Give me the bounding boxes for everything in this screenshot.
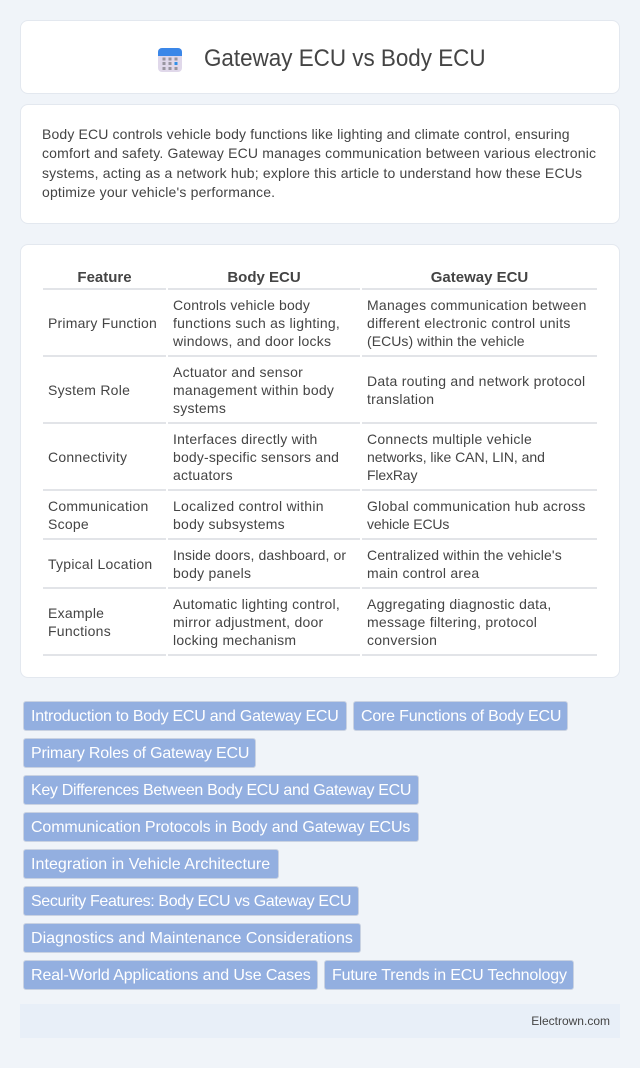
text: different electronic control units xyxy=(367,315,571,331)
text: Aggregating diagnostic data, xyxy=(367,596,551,612)
header card xyxy=(20,20,620,94)
text: management within body xyxy=(173,382,334,398)
tag: real-world xyxy=(23,960,318,990)
tag: integration: Integration in Vehicle Architecture xyxy=(31,856,270,873)
text: body-specific sensors and xyxy=(173,449,339,465)
text: Manages communication between xyxy=(367,297,587,313)
row: communication scope: Communication xyxy=(48,498,149,514)
tag: introduction: Introduction to Body ECU and Gateway ECU xyxy=(31,708,338,725)
tag: core functions xyxy=(353,701,568,731)
intro text xyxy=(42,126,596,200)
text: networks, like CAN, LIN, and xyxy=(367,449,545,465)
text: vehicle ECUs xyxy=(367,516,449,532)
text: actuators xyxy=(173,467,233,483)
tag: core functions: Core Functions of Body ECU xyxy=(361,708,561,725)
text: conversion xyxy=(367,632,437,648)
tag: introduction xyxy=(23,701,347,731)
row: communication scope xyxy=(48,498,149,532)
tag: communication protocols: Communication Protocols in Body and Gateway ECUs xyxy=(31,819,410,836)
header: Body ECU: Body ECU xyxy=(227,269,301,286)
intro text: optimize your vehicle's performance. xyxy=(42,184,275,200)
row: example functions xyxy=(48,605,111,639)
comparison table panel xyxy=(20,244,620,678)
text: Automatic lighting control, xyxy=(173,596,340,612)
tag: primary roles xyxy=(23,738,256,768)
icon: calendar xyxy=(158,48,182,72)
text: functions such as lighting, xyxy=(173,315,340,331)
text: Localized control within xyxy=(173,498,324,514)
tag: security xyxy=(23,886,359,916)
text: locking mechanism xyxy=(173,632,296,648)
intro text: systems, acting as a network hub; explore this article to understand how these ECUs xyxy=(42,165,582,181)
row: example functions: Example xyxy=(48,605,104,621)
text: Actuator and sensor xyxy=(173,364,303,380)
tag: diagnostics xyxy=(23,923,361,953)
text: Data routing and network protocol xyxy=(367,373,585,389)
text: body panels xyxy=(173,565,251,581)
header: Feature: Feature xyxy=(77,269,132,286)
header: Gateway ECU: Gateway ECU xyxy=(431,269,528,286)
text: Controls vehicle body xyxy=(173,297,310,313)
text: main control area xyxy=(367,565,479,581)
text: (ECUs) within the vehicle xyxy=(367,333,525,349)
intro card xyxy=(20,104,620,224)
text: Inside doors, dashboard, or xyxy=(173,547,346,563)
text: Interfaces directly with xyxy=(173,431,318,447)
intro text: comfort and safety. Gateway ECU manages communication between various electronic xyxy=(42,145,596,161)
row: primary function: Primary Function xyxy=(48,315,157,331)
tag: key differences: Key Differences Between Body ECU and Gateway ECU xyxy=(31,782,411,799)
tag: key differences xyxy=(23,775,419,805)
text: Centralized within the vehicle's xyxy=(367,547,562,563)
text: windows, and door locks xyxy=(173,333,331,349)
row: system role: System Role xyxy=(48,382,130,398)
tag: primary roles: Primary Roles of Gateway ECU xyxy=(31,745,249,762)
text: systems xyxy=(173,400,226,416)
text: mirror adjustment, door xyxy=(173,614,323,630)
footer credit: Electrown.com xyxy=(531,1014,610,1028)
tag: communication protocols xyxy=(23,812,419,842)
tag: security: Security Features: Body ECU vs Gateway ECU xyxy=(31,893,351,910)
tag: integration xyxy=(23,849,279,879)
tag: future trends: Future Trends in ECU Technology xyxy=(332,967,567,984)
tag: diagnostics: Diagnostics and Maintenance Considerations xyxy=(31,930,353,947)
tag: real-world: Real-World Applications and Use Cases xyxy=(31,967,311,984)
row: typical location: Typical Location xyxy=(48,556,152,572)
text: body subsystems xyxy=(173,516,285,532)
intro text: Body ECU controls vehicle body functions like lighting and climate control, ensuring xyxy=(42,126,570,142)
text: Global communication hub across xyxy=(367,498,586,514)
text: Connects multiple vehicle xyxy=(367,431,532,447)
text: translation xyxy=(367,391,434,407)
row: example functions: Functions xyxy=(48,623,111,639)
text: message filtering, protocol xyxy=(367,614,537,630)
row: communication scope: Scope xyxy=(48,516,89,532)
tag: future trends xyxy=(324,960,574,990)
text: FlexRay xyxy=(367,467,417,483)
row: connectivity: Connectivity xyxy=(48,449,127,465)
title: Gateway ECU vs Body ECU xyxy=(204,45,486,72)
footer xyxy=(20,1004,620,1038)
